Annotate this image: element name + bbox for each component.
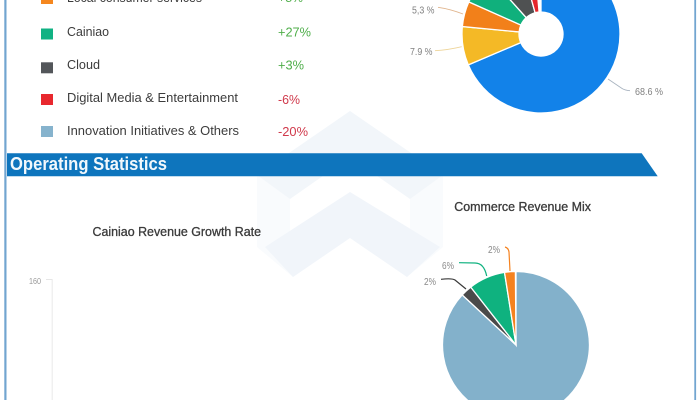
slice: dark grey	[488, 0, 535, 18]
donut chart: revenue mix	[462, 0, 620, 113]
legend row: Cloud: Cloud	[67, 58, 100, 72]
legend row: Digital Media and Entertainment: -6%	[278, 92, 300, 107]
slice: yellow 7.9%	[462, 27, 521, 65]
section banner: Operating Statistics	[7, 153, 658, 176]
legend row: Cainiao	[41, 24, 311, 40]
pie labels and leader lines: 2%	[488, 245, 500, 256]
legend row: Cainiao: +27%	[278, 24, 311, 40]
legend row: Innovation Initiatives and Others: -20%	[278, 124, 308, 139]
pie labels and leader lines	[424, 245, 510, 289]
watermark logo	[257, 111, 443, 277]
slice: blue 68.6%	[468, 0, 620, 113]
legend row: local consumer services	[41, 0, 303, 5]
heading: Cainiao Revenue Growth Rate: Cainiao Revenue Growth Rate	[92, 225, 261, 239]
donut labels and leader lines	[410, 6, 663, 98]
slice: orange 5.3%	[462, 2, 521, 32]
donut labels and leader lines: 68.6 %	[635, 87, 663, 98]
legend row: Digital Media and Entertainment	[41, 91, 300, 107]
slice: orange 2%	[504, 272, 516, 345]
chart axis: Cainiao revenue growth	[29, 277, 53, 400]
legend: revenue growth by segment	[41, 0, 311, 139]
legend row: Innovation Initiatives and Others	[41, 124, 308, 139]
legend row: Digital Media and Entertainment: Digital Media & Entertainment	[67, 91, 239, 105]
legend row: Cainiao: Cainiao	[67, 25, 109, 39]
legend row: Cloud: +3%	[278, 58, 304, 72]
heading: Commerce Revenue Mix: Commerce Revenue Mix	[454, 200, 592, 214]
section banner: Operating Statistics: Operating Statistics	[10, 154, 167, 174]
slice: red	[520, 0, 539, 13]
slice: dark grey 2%	[462, 287, 516, 345]
pie labels and leader lines: 6%	[442, 261, 454, 272]
legend row: Innovation Initiatives and Others: Innovation Initiatives & Others	[67, 124, 239, 138]
donut labels and leader lines: 7.9 %	[410, 47, 433, 58]
legend row: Cloud	[41, 58, 304, 73]
donut labels and leader lines: 5,3 %	[412, 6, 435, 16]
slice: green 6%	[471, 272, 516, 345]
pie chart: commerce revenue mix	[442, 272, 589, 400]
pie labels and leader lines: 2%	[424, 277, 436, 288]
chart axis: Cainiao revenue growth: 160	[29, 277, 41, 286]
slice: main share	[442, 272, 589, 400]
slice: green	[469, 0, 526, 25]
